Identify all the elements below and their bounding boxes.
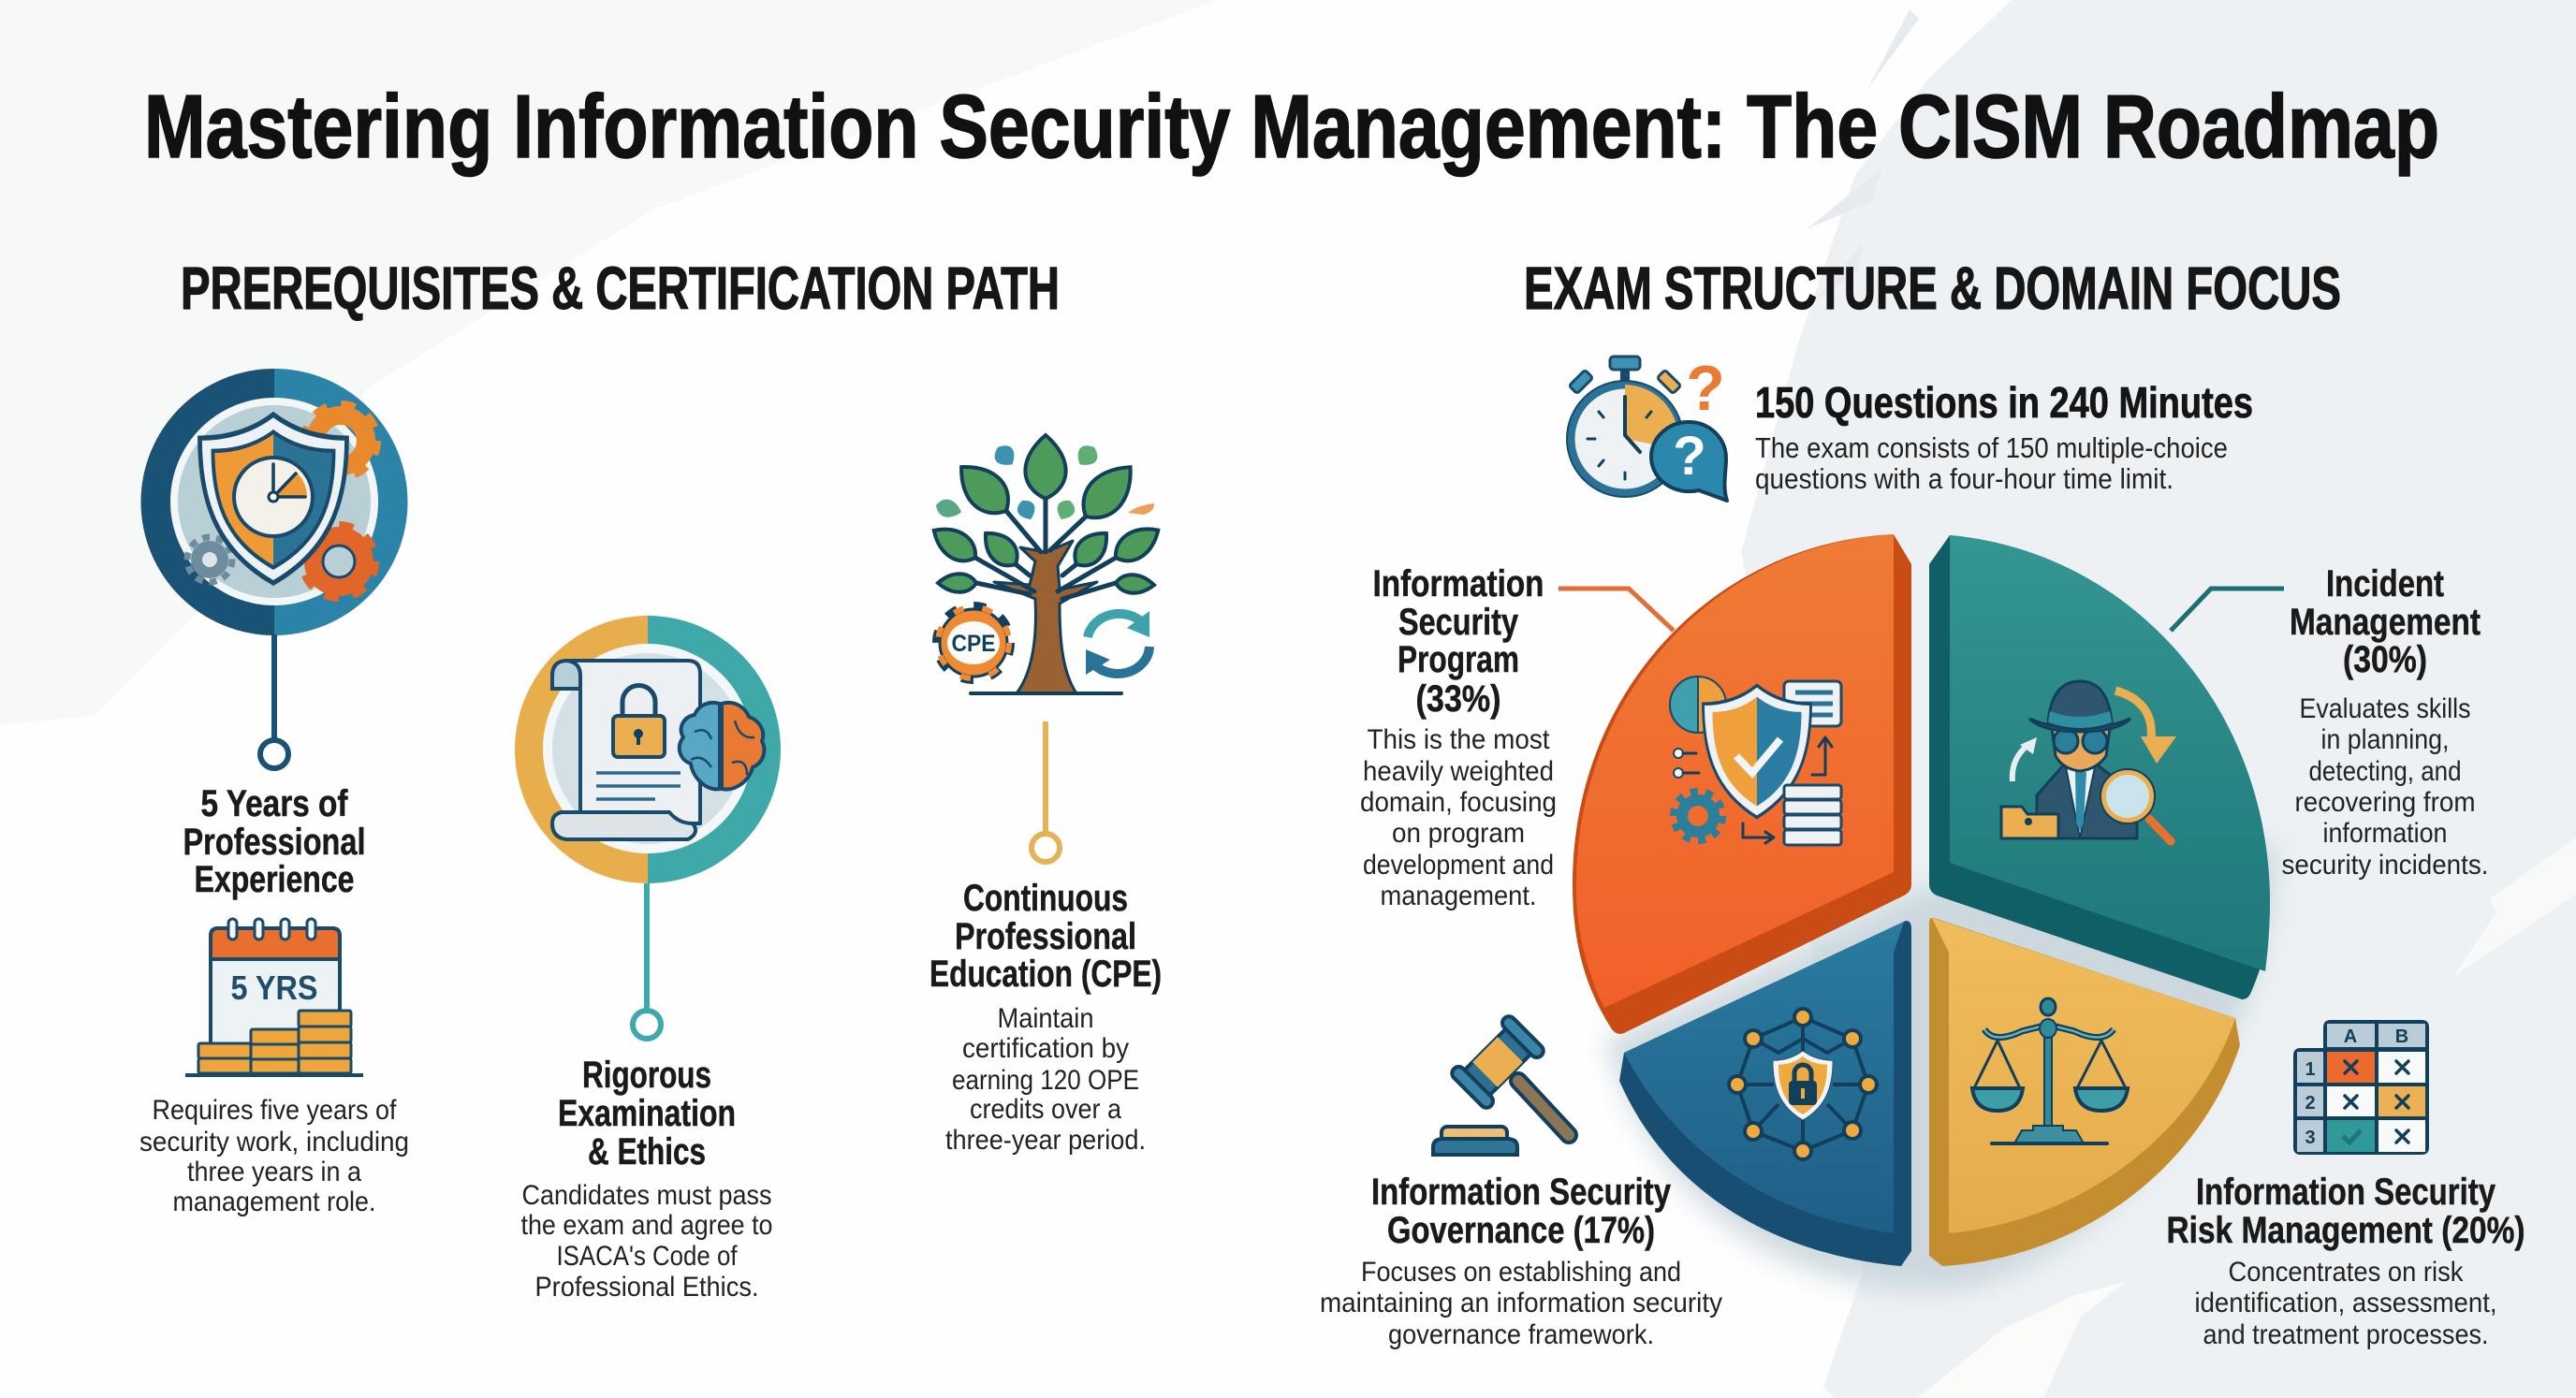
step heading: & Ethics — [588, 1131, 706, 1172]
slice: information security governance — [1619, 921, 1911, 1266]
label: information security program: This is the most — [1367, 724, 1550, 755]
icon: risk matrix: 2 — [2305, 1093, 2316, 1114]
step description: ISACA's Code of — [556, 1241, 738, 1272]
connector stem — [271, 634, 277, 739]
icon: risk matrix: 3 — [2305, 1128, 2316, 1148]
connector stem — [1043, 721, 1048, 834]
chart: exam domain pie — [1573, 534, 2270, 1266]
label: incident management: information — [2323, 818, 2447, 849]
label: information security governance: Governance (17%) — [1387, 1210, 1655, 1251]
label: information security risk management: Concentrates on risk — [2228, 1257, 2464, 1288]
slice: information security program — [1573, 534, 1911, 1034]
connector: program label — [1559, 589, 1674, 631]
label: information security risk management — [2166, 1172, 2525, 1350]
step description: credits over a — [970, 1094, 1121, 1125]
step description: earning 120 OPE — [952, 1065, 1139, 1096]
step description: three years in a — [187, 1157, 361, 1187]
panel: experience step — [139, 369, 409, 1217]
label: information security program: on program — [1392, 818, 1525, 849]
icon: security network — [1729, 1009, 1877, 1159]
panel: examination step — [515, 616, 781, 1303]
label: information security program: management. — [1380, 881, 1537, 911]
icon: balance scales — [1972, 998, 2128, 1145]
label: information security program — [1360, 563, 1557, 911]
step description: Professional Ethics. — [535, 1272, 758, 1303]
label: information security program: Security — [1398, 602, 1519, 643]
icon: CPE badge — [936, 605, 1011, 680]
step heading: Examination — [558, 1093, 736, 1134]
label: information security program: Information — [1372, 563, 1544, 604]
label: information security program: (33%) — [1415, 678, 1501, 720]
step description: security work, including — [139, 1127, 409, 1158]
icon: growth tree — [927, 435, 1165, 695]
icon: risk matrix: B — [2395, 1027, 2408, 1047]
label: incident management: (30%) — [2343, 639, 2427, 680]
label: incident management: Management — [2290, 602, 2481, 643]
icon: scroll and brain medallion — [515, 616, 781, 883]
label: information security governance — [1320, 1172, 1722, 1350]
icon: calendar with coins — [185, 919, 363, 1077]
label: information security program: domain, focusing — [1360, 787, 1557, 818]
label: information security program: development and — [1363, 850, 1554, 881]
step heading: Professional — [955, 916, 1136, 957]
slice: incident management — [1929, 535, 2270, 999]
icon: risk matrix: A — [2344, 1027, 2357, 1047]
slice: information security risk management — [1929, 918, 2240, 1266]
label: information security governance: Information Security — [1371, 1172, 1672, 1213]
label: information security program: heavily weighted — [1363, 756, 1554, 787]
label: information security program: Program — [1398, 639, 1519, 680]
panel: exam format — [1567, 353, 2253, 501]
step description: management role. — [172, 1187, 376, 1217]
step heading — [183, 783, 365, 900]
icon: stopwatch and question bubble — [1567, 353, 1727, 501]
step heading — [558, 1055, 736, 1172]
step description: certification by — [962, 1033, 1129, 1064]
panel: continuing education step — [927, 435, 1165, 1156]
label: incident management: in planning, — [2321, 724, 2449, 755]
exam format description: The exam consists of 150 multiple-choice — [1755, 431, 2228, 464]
icon: risk matrix — [2293, 1020, 2429, 1155]
step heading: Professional — [183, 822, 365, 863]
label: information security risk management: identification, assessment, — [2194, 1288, 2497, 1318]
exam format description: questions with a four-hour time limit. — [1755, 462, 2174, 495]
step heading: Experience — [195, 859, 354, 900]
icon: detective — [2001, 681, 2176, 841]
icon: gavel — [1433, 1013, 1569, 1155]
step description: Maintain — [998, 1003, 1093, 1034]
icon: shield clock medallion — [141, 369, 408, 635]
step heading: Rigorous — [582, 1055, 711, 1096]
step heading: Education (CPE) — [929, 954, 1162, 995]
label: information security risk management: Information Security — [2196, 1172, 2496, 1213]
label: incident management: Evaluates skills — [2299, 693, 2471, 724]
step heading: 5 Years of — [200, 783, 348, 824]
step heading — [929, 878, 1162, 995]
connector node — [1032, 834, 1060, 862]
icon: risk matrix: 1 — [2305, 1059, 2316, 1080]
label: incident management — [2282, 563, 2488, 881]
label: incident management: security incidents. — [2282, 850, 2488, 881]
icon: stopwatch and question bubble: ? — [1673, 426, 1706, 487]
label: incident management: recovering from — [2295, 787, 2475, 818]
connector: incident label — [2171, 589, 2284, 631]
step description — [945, 1003, 1146, 1156]
label: information security governance: governance framework. — [1388, 1319, 1654, 1350]
icon: calendar with coins: 5 YRS — [230, 968, 318, 1007]
step heading: Continuous — [963, 878, 1128, 919]
exam format description — [1755, 431, 2228, 495]
step description: Candidates must pass — [522, 1180, 771, 1211]
step description: three-year period. — [945, 1125, 1146, 1156]
icon: stopwatch and question bubble: ? — [1686, 353, 1725, 424]
icon: renewal arrows — [1086, 611, 1149, 675]
heading: prerequisites: PREREQUISITES & CERTIFICATION PATH — [181, 255, 1060, 322]
label: incident management: Incident — [2326, 563, 2444, 604]
connector node — [260, 740, 288, 768]
step description: the exam and agree to — [520, 1210, 773, 1241]
icon: program shield — [1670, 677, 1841, 845]
label: information security governance: Focuses on establishing and — [1361, 1257, 1681, 1288]
connector node — [633, 1011, 661, 1039]
label: information security governance: maintaining an information security — [1320, 1288, 1722, 1318]
icon: CPE badge: CPE — [951, 631, 996, 657]
label: information security risk management: and treatment processes. — [2203, 1319, 2488, 1350]
step description — [520, 1180, 773, 1303]
connector stem — [644, 883, 650, 1011]
label: incident management: detecting, and — [2308, 756, 2462, 787]
step description — [139, 1095, 409, 1217]
exam format heading: 150 Questions in 240 Minutes — [1755, 378, 2253, 427]
step description: Requires five years of — [152, 1095, 397, 1126]
